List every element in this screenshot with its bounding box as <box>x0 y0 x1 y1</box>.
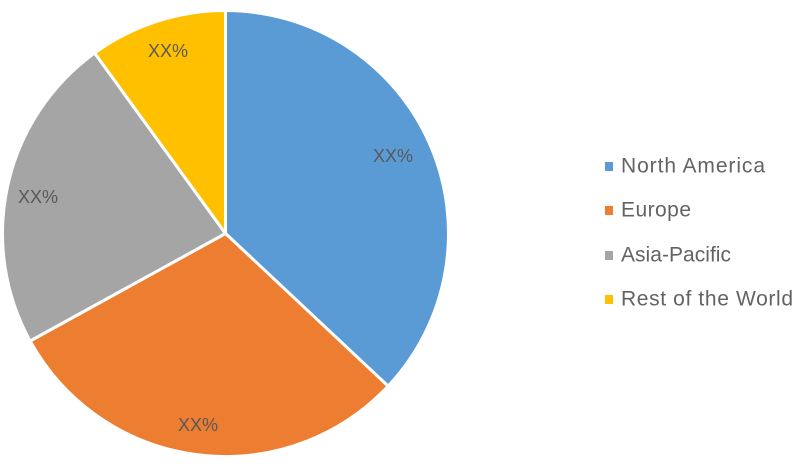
label: Rest of the World value: XX% <box>148 41 188 61</box>
slice: Rest of the World <box>95 10 225 234</box>
slice: Asia-Pacific <box>2 53 226 341</box>
legend item: Europe: Europe <box>621 198 691 222</box>
legend item: Rest of the World: Rest of the World <box>621 288 793 310</box>
label: Europe value: XX% <box>178 415 218 435</box>
slice: Europe <box>30 234 388 457</box>
label: Asia-Pacific value: XX% <box>18 187 58 207</box>
legend item: North America: North America <box>621 154 765 178</box>
data labels <box>18 41 413 435</box>
pie chart <box>2 10 448 457</box>
legend item: Asia-Pacific: Asia-Pacific <box>621 244 731 266</box>
legend <box>605 154 793 310</box>
slice: North America <box>226 10 448 386</box>
label: North America value: XX% <box>373 146 413 166</box>
